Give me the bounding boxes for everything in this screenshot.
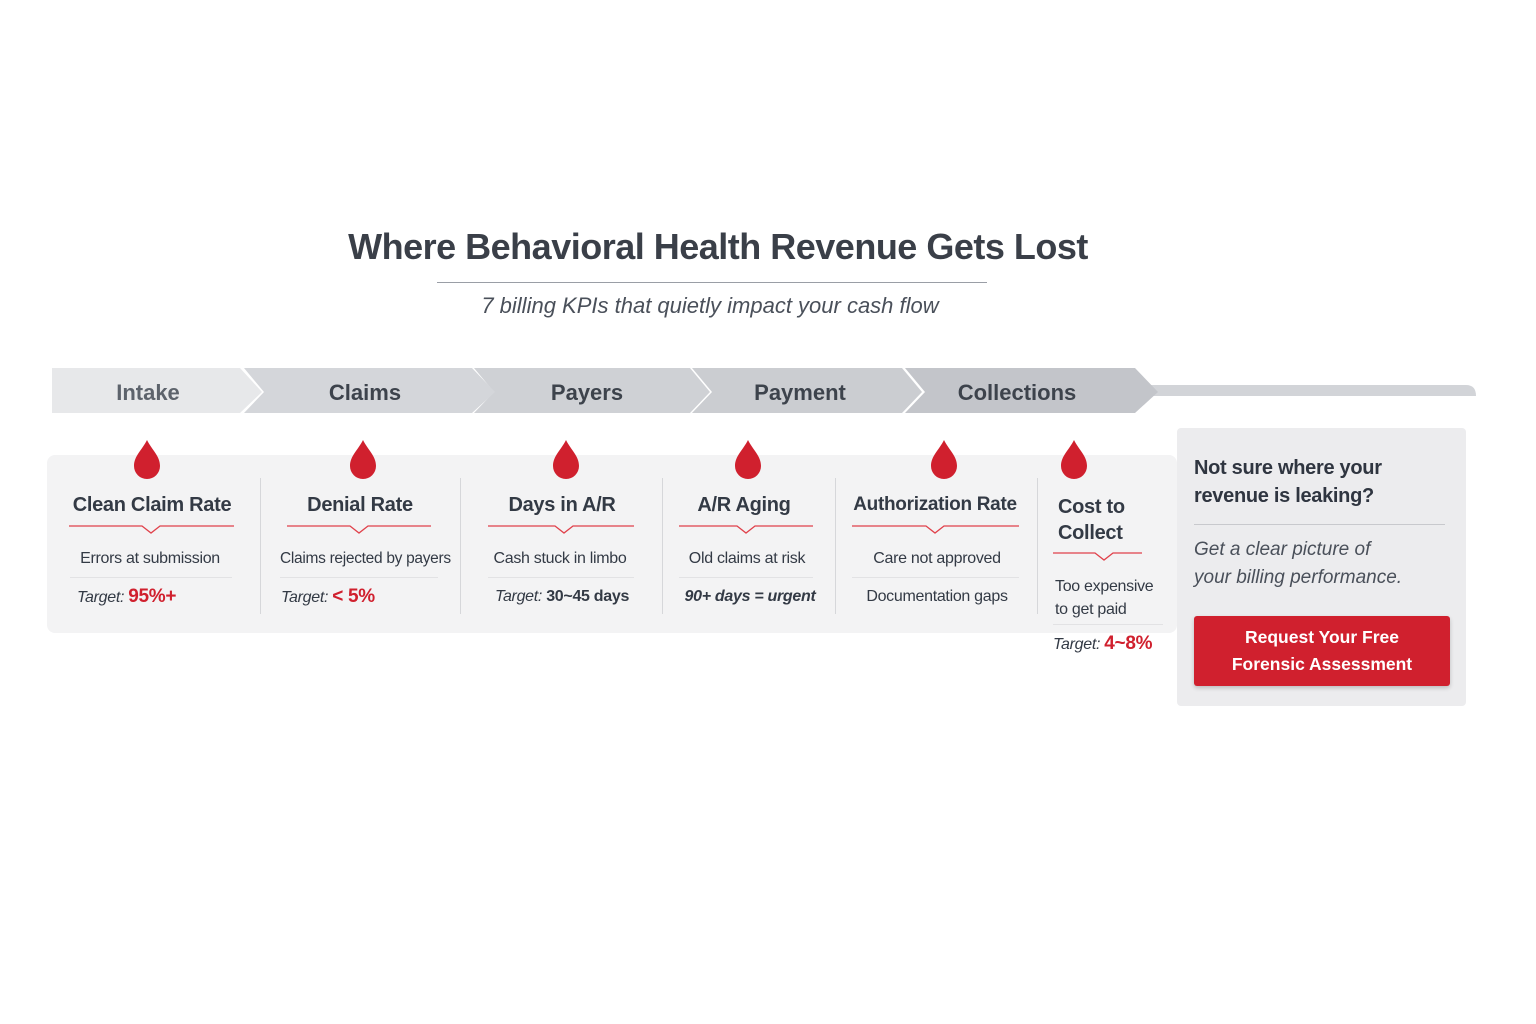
CTA button: Request Your Free: [1245, 627, 1399, 647]
KPI 1: Clean Claim Rate: [73, 494, 231, 516]
text: Old claims at risk: [689, 550, 805, 567]
process arrow band: Payers: [551, 380, 623, 405]
CTA button: [1194, 616, 1450, 686]
CTA text: [1192, 539, 1402, 588]
panel: KPIs: [47, 455, 1177, 633]
text: Cash stuck in limbo: [493, 550, 627, 567]
callout: CTA: [1177, 428, 1466, 706]
text: Errors at submission: [80, 550, 220, 567]
KPI 6: Collect: [1058, 522, 1123, 544]
process arrow band: Claims: [329, 380, 401, 405]
KPI 6: [1058, 496, 1125, 544]
KPI 4: A/R Aging: [697, 494, 791, 516]
text: Care not approved: [873, 550, 1001, 567]
process arrow band: [52, 368, 1476, 413]
text: Target: 95%+: [77, 586, 176, 607]
icons: drops and red separators: [69, 440, 1142, 561]
KPI 2: Denial Rate: [307, 494, 413, 516]
title: Where Behavioral Health Revenue Gets Lost: [348, 226, 1088, 267]
KPI 5: Authorization Rate: [853, 494, 1017, 515]
CTA button: Forensic Assessment: [1232, 654, 1412, 674]
text: 90+ days = urgent: [685, 588, 815, 605]
text: Target: 4~8%: [1053, 633, 1152, 654]
CTA heading: revenue is leaking?: [1194, 485, 1374, 507]
text: Documentation gaps: [866, 588, 1008, 605]
CTA text: your billing performance.: [1194, 567, 1402, 588]
text: Claims rejected by payers: [280, 550, 451, 567]
text: Too expensive: [1055, 578, 1153, 595]
CTA heading: Not sure where your: [1194, 457, 1382, 479]
KPI 3: Days in A/R: [508, 494, 616, 516]
KPI 6: Cost to: [1058, 496, 1125, 518]
text: to get paid: [1055, 601, 1126, 618]
process arrow band: Intake: [116, 380, 180, 405]
process arrow band: Payment: [754, 380, 847, 405]
process arrow band: Collections: [958, 380, 1076, 405]
subtitle: 7 billing KPIs that quietly impact your cash flow: [481, 293, 939, 318]
CTA text: Get a clear picture of: [1194, 539, 1370, 560]
CTA heading: [1194, 457, 1382, 507]
text: Target: 30~45 days: [495, 588, 629, 605]
text: Target: < 5%: [281, 586, 375, 607]
